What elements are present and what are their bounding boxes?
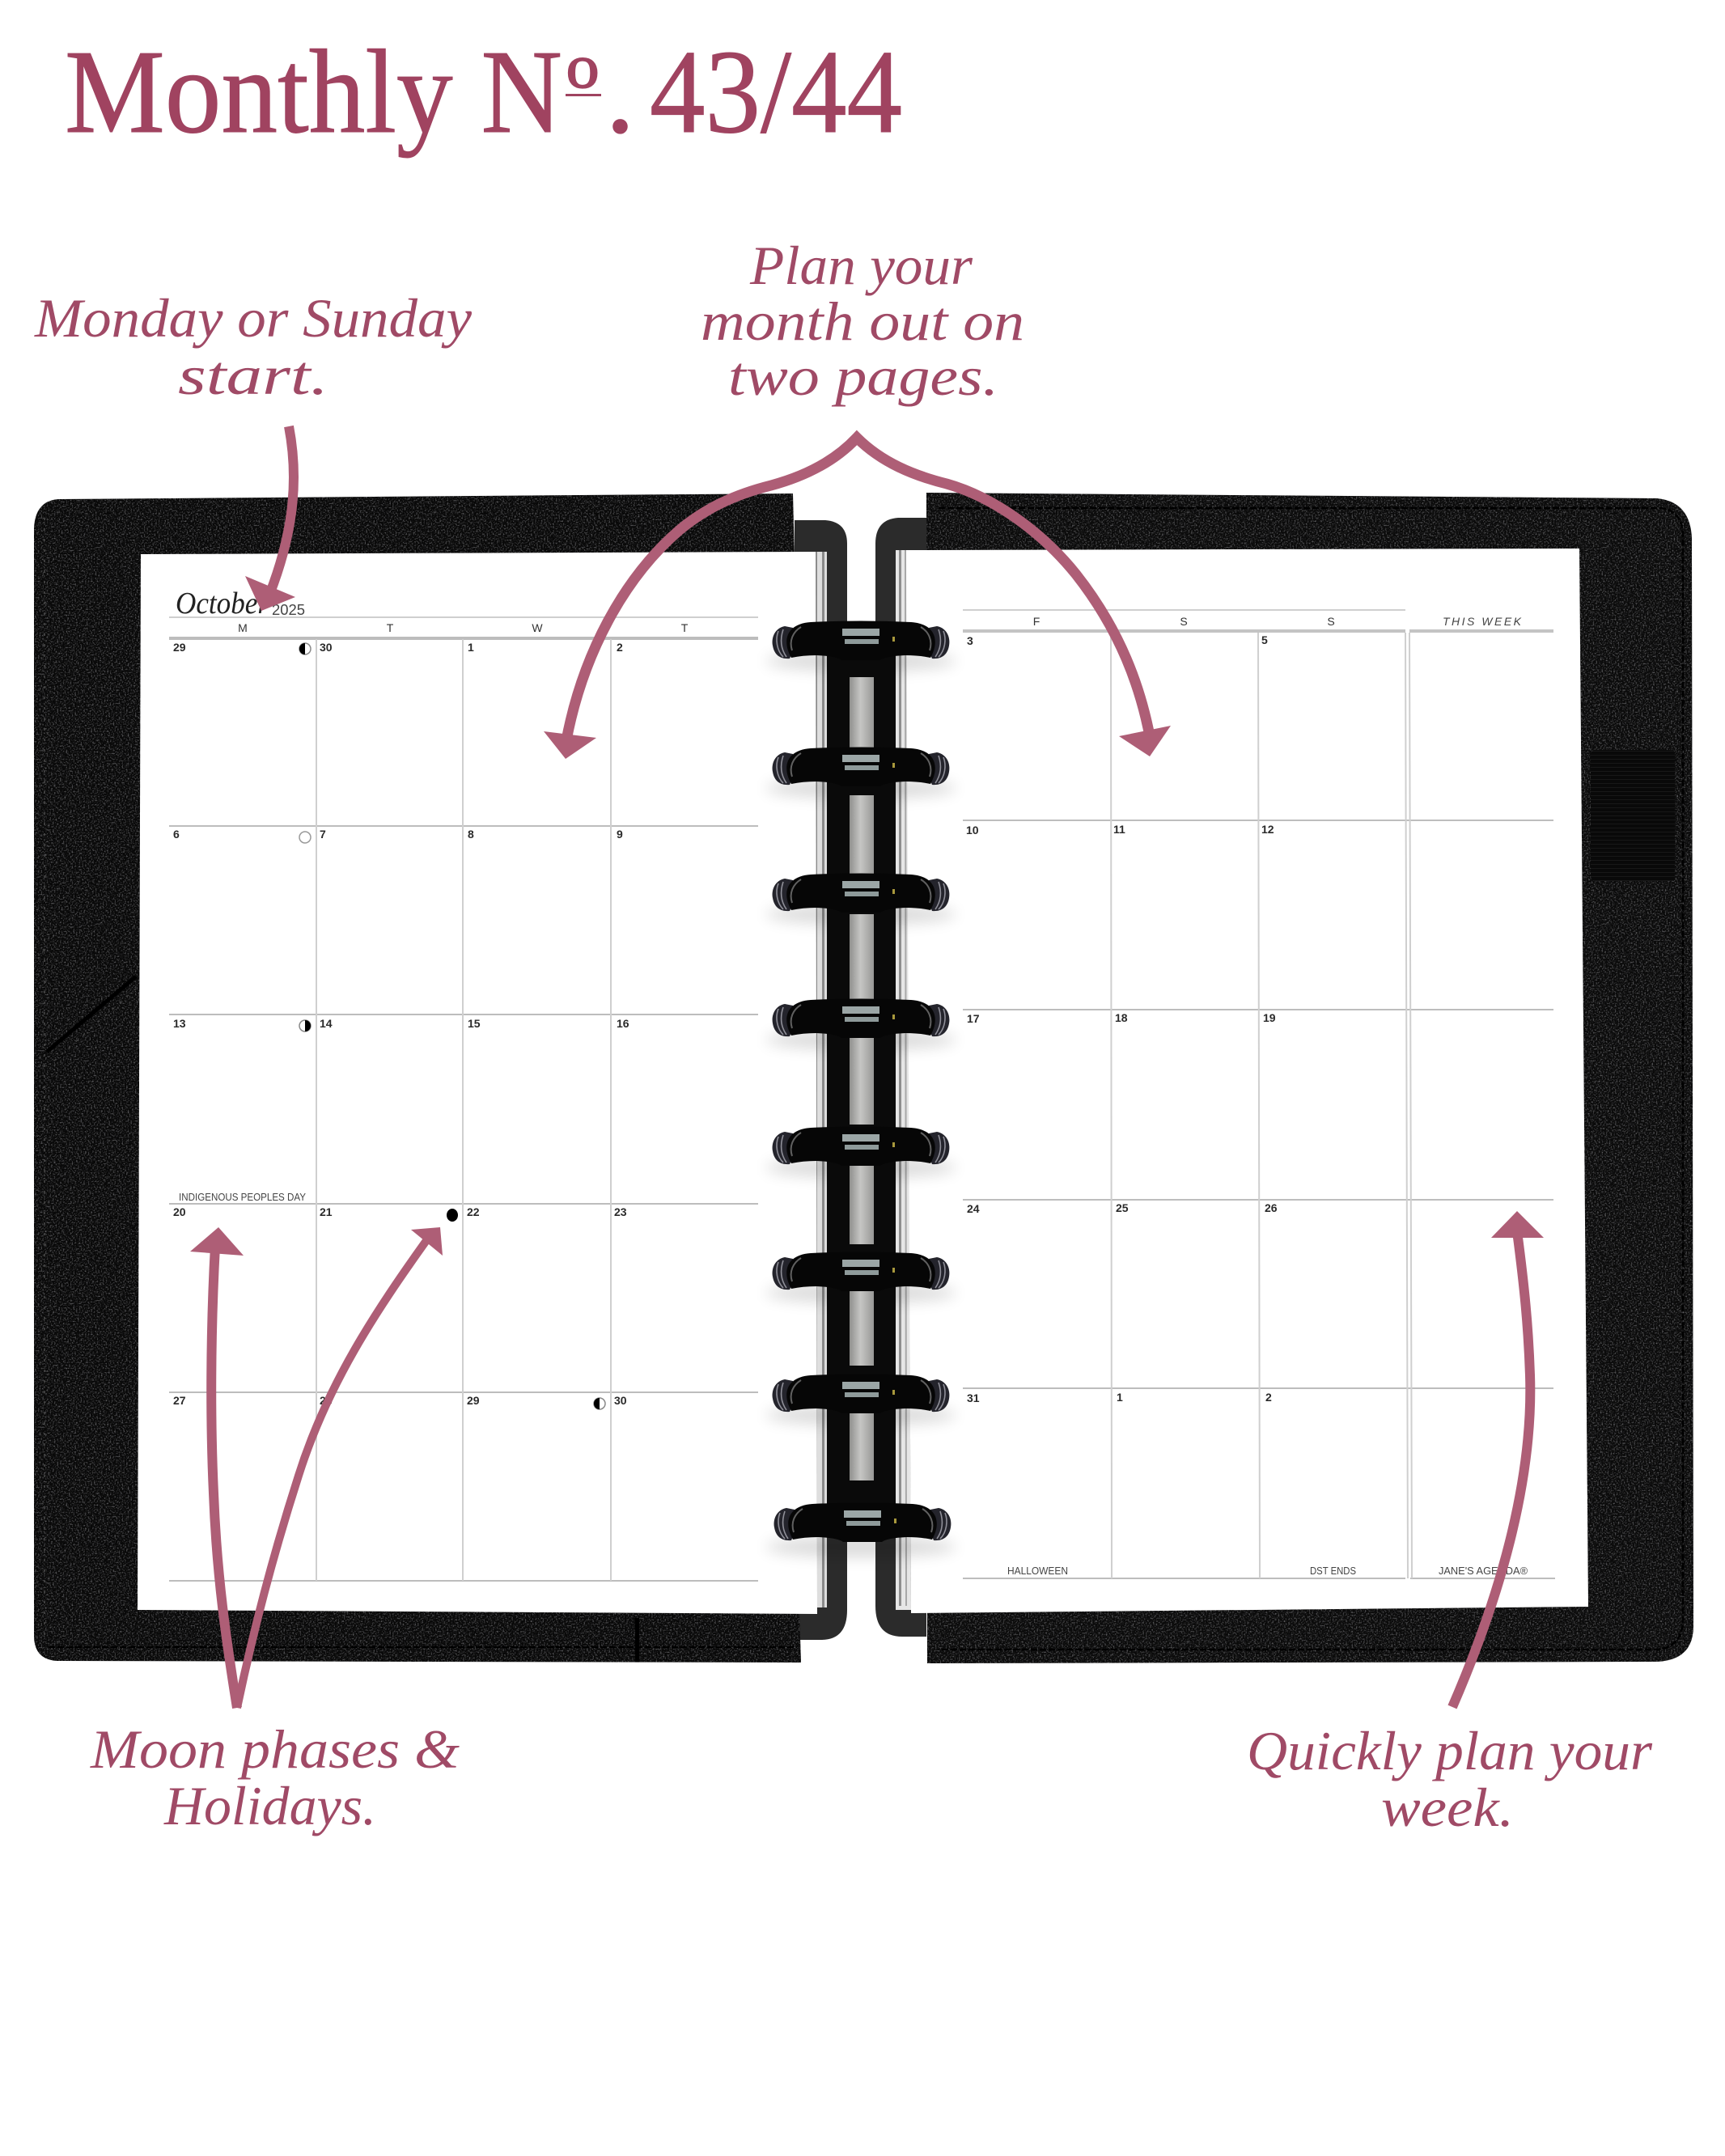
callout: Monday or Sunday start: Monday or Sunday — [34, 287, 473, 349]
left page dates: 2 — [617, 641, 623, 654]
right page dates: 1 — [1117, 1391, 1123, 1404]
left page dates: 20 — [173, 1205, 186, 1218]
callout: Moon phases and Holidays — [90, 1718, 460, 1836]
right page weekday labels: S — [1180, 615, 1188, 628]
left page dates: 22 — [467, 1205, 480, 1218]
left page dates: 29 — [173, 641, 186, 654]
binder disc ring 2 — [773, 748, 949, 786]
left page weekday labels: W — [532, 621, 543, 634]
right page weekday labels: S — [1327, 615, 1335, 628]
left page dates: 9 — [617, 828, 623, 841]
left page dates: 28 — [320, 1394, 333, 1407]
left page weekday labels — [238, 621, 689, 634]
arrow: to holiday label — [190, 1227, 244, 1708]
right page footer labels — [1007, 1565, 1528, 1577]
left page dates — [173, 641, 629, 1407]
callout: Quickly plan your week: Quickly plan your — [1247, 1720, 1653, 1781]
binder spine: black strip with grey windows — [827, 631, 896, 1529]
panel: left planner page — [138, 552, 817, 1614]
left page month heading: 2025 — [272, 602, 305, 618]
spine: metal binder plates — [795, 518, 926, 1640]
binder disc ring 8 — [774, 1503, 951, 1542]
left page dates: 1 — [468, 641, 474, 654]
binder disc ring 1 — [773, 621, 949, 660]
left page weekday labels: T — [387, 621, 394, 634]
title: Monthly N — [65, 26, 562, 159]
callout: Quickly plan your week — [1247, 1720, 1653, 1838]
callout: Plan your month out on two pages: two pages. — [728, 345, 998, 407]
left page dates: 30 — [614, 1394, 627, 1407]
right page weekday labels: F — [1033, 615, 1040, 628]
this week heading: THIS WEEK — [1443, 615, 1522, 628]
left page dates: 6 — [173, 828, 180, 841]
right page dates: 11 — [1113, 823, 1125, 836]
right page dates: 18 — [1115, 1011, 1128, 1024]
callout: Moon phases and Holidays: Holidays. — [163, 1775, 376, 1836]
left page dates: 7 — [320, 828, 326, 841]
callout: Plan your month out on two pages: month out on — [701, 290, 1024, 352]
binder disc ring 7 — [773, 1374, 949, 1413]
left page month heading: October — [176, 587, 269, 621]
title: º — [566, 35, 599, 151]
callout: Quickly plan your week: week. — [1381, 1777, 1514, 1838]
left page dates: 15 — [468, 1017, 481, 1030]
right page weekday labels — [1033, 615, 1335, 628]
title: 43/44 — [650, 26, 902, 159]
panel: right leather cover — [922, 485, 1707, 1675]
elastic pen loop — [1591, 750, 1675, 881]
right page dates: 24 — [967, 1202, 980, 1215]
left page dates: 30 — [320, 641, 333, 654]
right page dates: 19 — [1263, 1011, 1276, 1024]
right page footer labels: DST ENDS — [1310, 1565, 1356, 1577]
moon phases — [299, 643, 605, 1409]
left page dates: 21 — [320, 1205, 333, 1218]
callout: Plan your month out on two pages — [701, 235, 1024, 407]
binder disc ring 6 — [773, 1252, 949, 1291]
left page weekday labels: M — [238, 621, 248, 634]
callout: Plan your month out on two pages: Plan your — [749, 235, 973, 296]
callout: Monday or Sunday start — [34, 287, 473, 406]
right page edges stack — [896, 550, 911, 1610]
left page dates: 27 — [173, 1394, 186, 1407]
binder disc ring 3 — [773, 874, 949, 913]
left page dates: 29 — [467, 1394, 480, 1407]
binder disc ring 4 — [773, 998, 949, 1038]
arrow: to moon phase — [237, 1227, 443, 1708]
arrow: to this week column — [1452, 1211, 1544, 1707]
right page dates: 26 — [1265, 1201, 1278, 1214]
right page dates: 3 — [967, 634, 973, 647]
callout: Monday or Sunday start: start. — [178, 345, 328, 406]
right page dates: 12 — [1261, 823, 1274, 836]
ring shadows — [765, 650, 956, 1557]
arrow: to month heading — [245, 426, 295, 611]
left page grid — [169, 617, 758, 1581]
left page dates: 13 — [173, 1017, 186, 1030]
panel: left leather cover — [24, 485, 809, 1675]
title: . — [605, 26, 635, 159]
panel: right planner page — [906, 549, 1588, 1613]
binder disc ring 5 — [773, 1126, 949, 1166]
right page footer labels: JANE'S AGENDA® — [1439, 1565, 1528, 1577]
callout: Moon phases and Holidays: Moon phases & — [90, 1718, 460, 1780]
right page grid — [963, 610, 1555, 1578]
left page dates: 23 — [614, 1205, 627, 1218]
holiday: Indigenous Peoples Day: INDIGENOUS PEOPLES DAY — [179, 1191, 306, 1203]
right page dates: 2 — [1265, 1391, 1272, 1404]
right page dates: 17 — [967, 1012, 980, 1025]
left page dates: 14 — [320, 1017, 333, 1030]
right page dates: 25 — [1116, 1201, 1129, 1214]
arrow: double brace to both pages — [544, 438, 1171, 759]
left page weekday labels: T — [681, 621, 689, 634]
right page dates: 31 — [967, 1391, 980, 1404]
title — [65, 26, 902, 159]
right page dates: 10 — [966, 824, 979, 837]
right page dates — [966, 633, 1278, 1404]
right page footer labels: HALLOWEEN — [1007, 1565, 1068, 1577]
left page dates: 16 — [617, 1017, 629, 1030]
right page dates: 5 — [1261, 633, 1268, 646]
left page dates: 8 — [468, 828, 474, 841]
left page edges stack — [816, 552, 827, 1607]
